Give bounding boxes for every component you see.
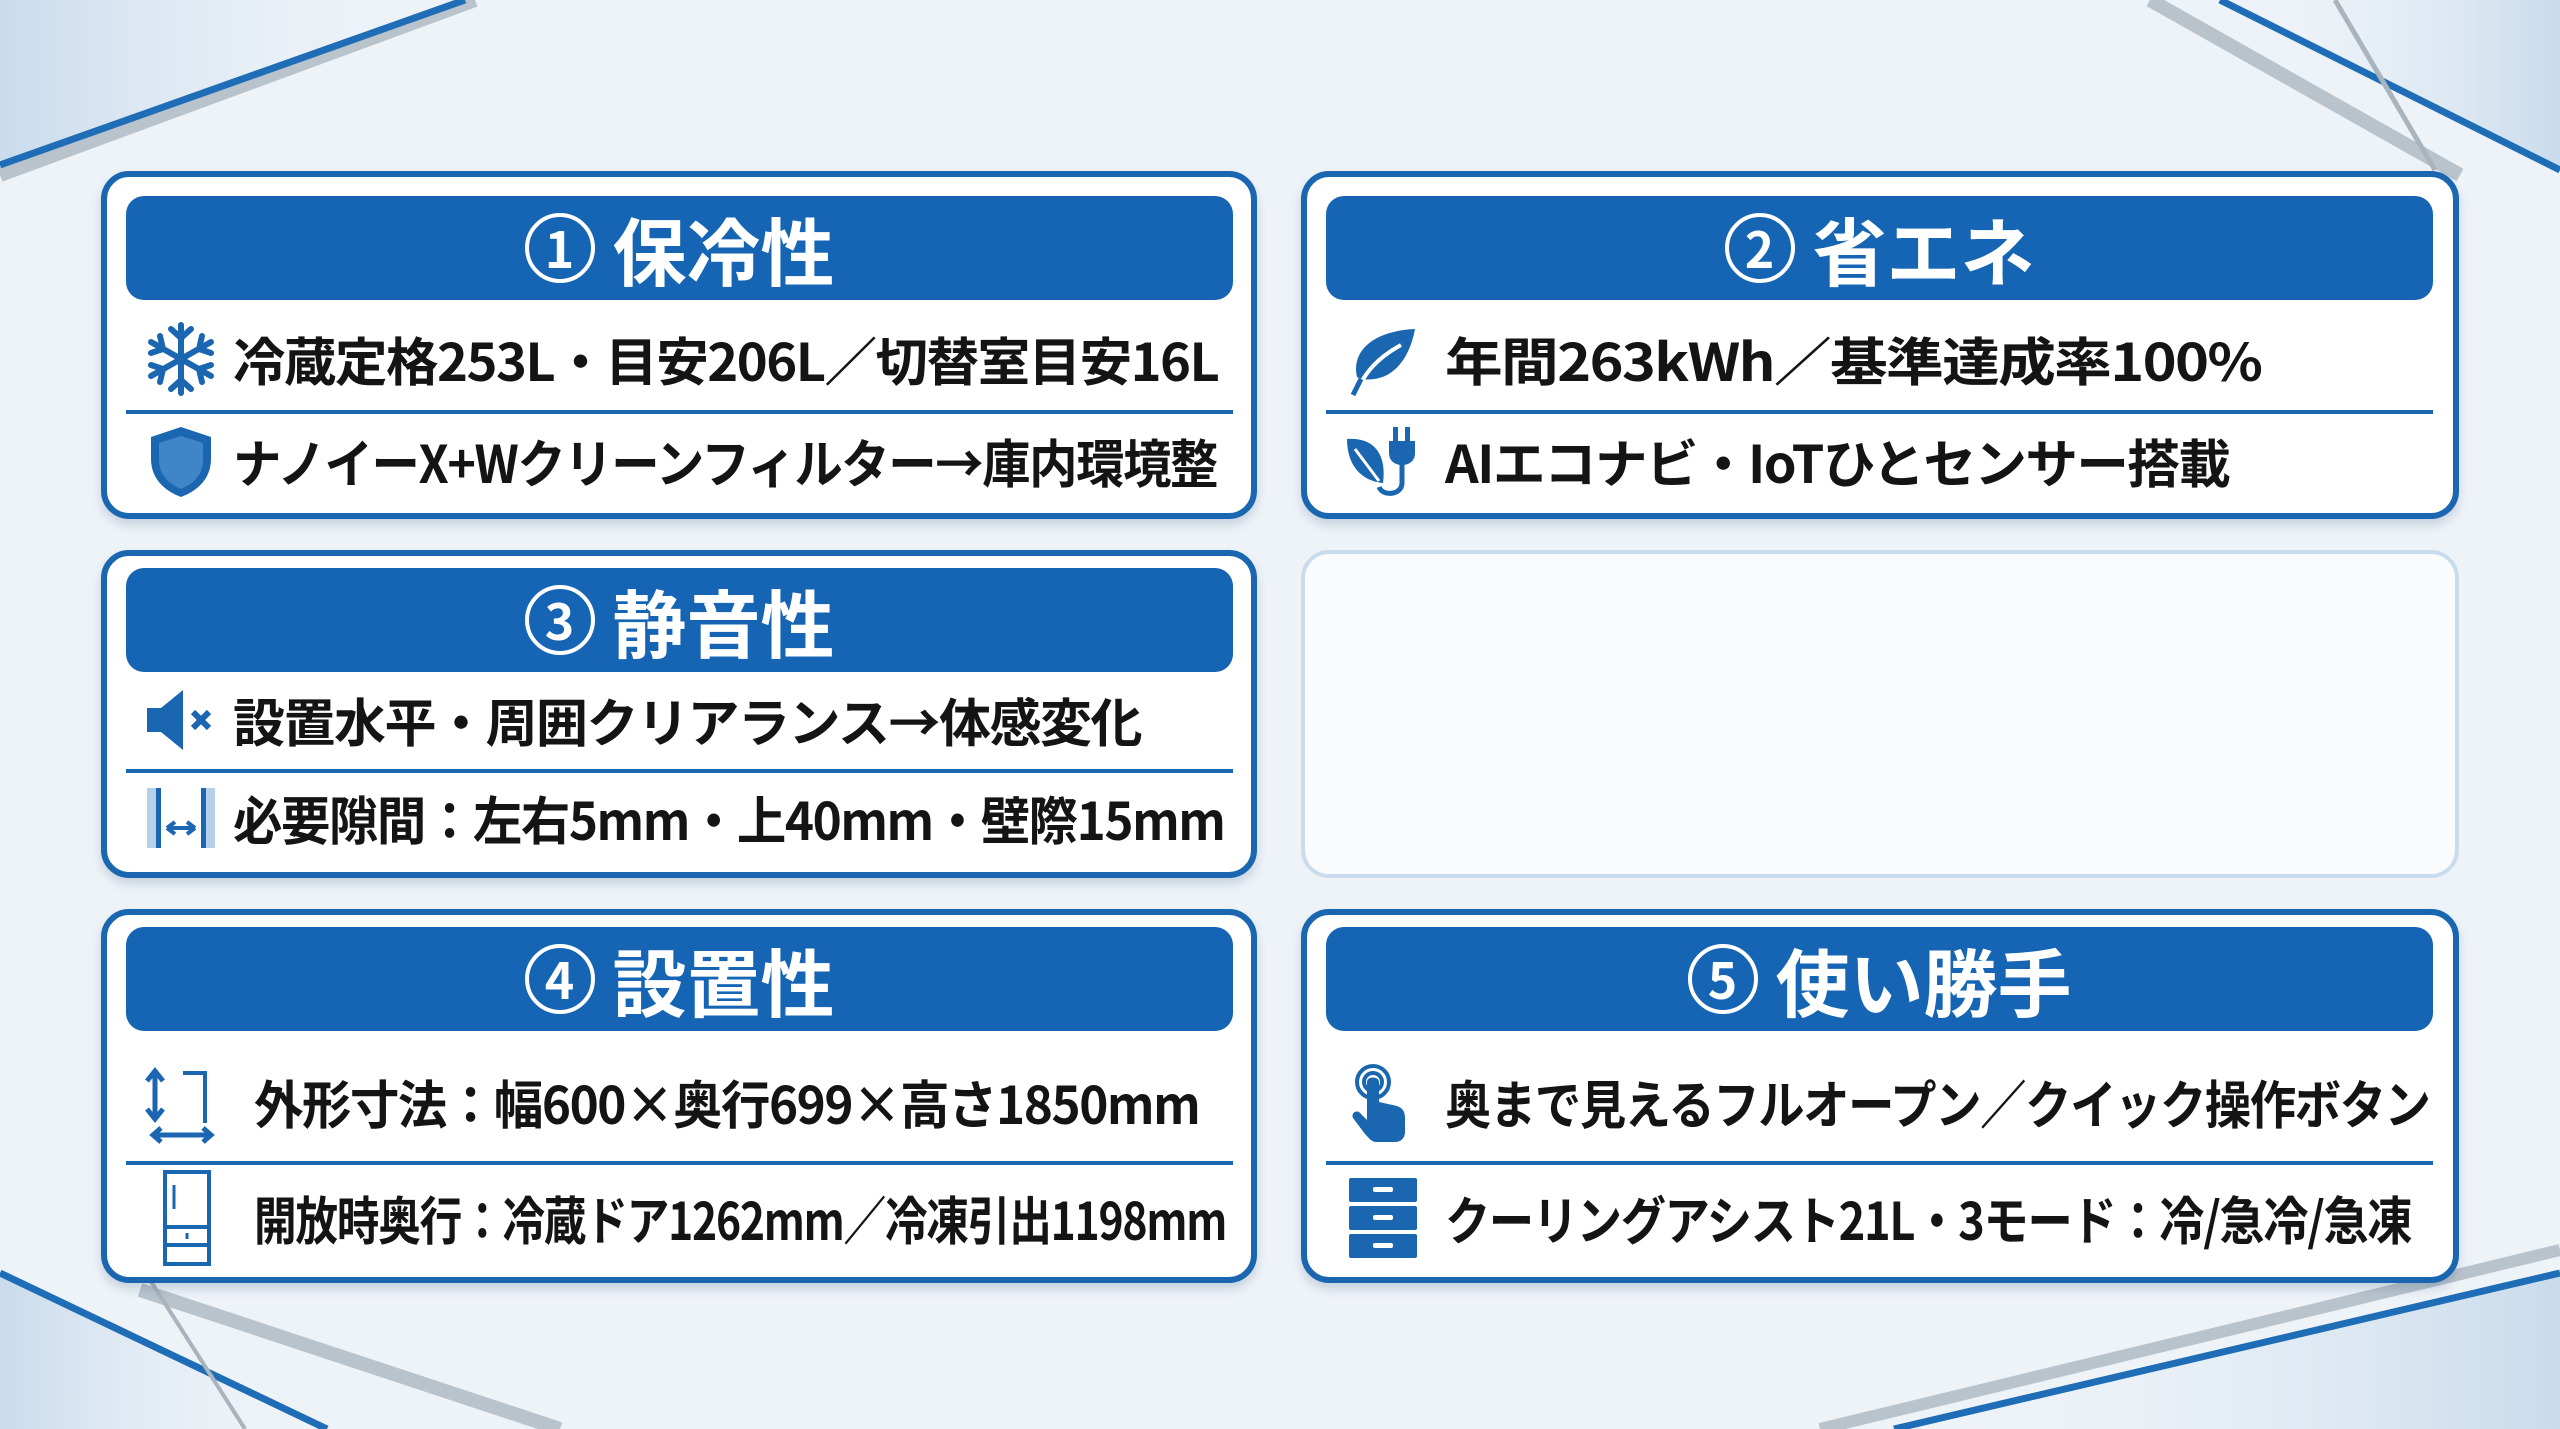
header 3: 静音性 <box>612 566 834 674</box>
header 5 <box>1326 927 2433 1031</box>
icon: dimension arrows <box>145 1067 215 1144</box>
row: cooling assist: クーリングアシスト21L・3モード：冷/急冷/急凍 <box>1445 1180 2411 1255</box>
header 1: 保冷性 <box>612 194 834 302</box>
icon: speaker mute <box>147 690 212 750</box>
row: energy: 年間263kWh／基準達成率100% <box>1445 321 2261 396</box>
header 3 <box>126 568 1233 672</box>
header 3: 3 <box>545 583 574 655</box>
row: filter: ナノイーX+Wクリーンフィルター→庫内環境整 <box>233 423 1217 498</box>
icon: touch hand <box>1352 1064 1405 1142</box>
row: capacity: 冷蔵定格253L・目安206L／切替室目安16L <box>233 321 1218 396</box>
header 1 <box>126 196 1233 300</box>
icon: snowflake <box>148 322 214 396</box>
icon: leaf plug <box>1347 427 1415 496</box>
header 5: 5 <box>1708 942 1737 1014</box>
row: dimensions: 外形寸法：幅600×奥行699×高さ1850mm <box>254 1064 1199 1139</box>
header 2 <box>1326 196 2433 300</box>
icon: leaf <box>1350 329 1415 396</box>
header 4: 4 <box>545 942 574 1014</box>
icon: shield <box>151 427 211 497</box>
icon: gap <box>147 788 215 848</box>
row: open depth: 開放時奥行：冷蔵ドア1262mm／冷凍引出1198mm <box>254 1180 1226 1255</box>
header 5: 使い勝手 <box>1776 926 2072 1032</box>
panel 4: 設置性 <box>101 909 1257 1283</box>
row: quiet: 設置水平・周囲クリアランス→体感変化 <box>233 682 1141 757</box>
empty panel <box>1301 550 2459 878</box>
row: AI: AIエコナビ・IoTひとセンサー搭載 <box>1445 423 2229 498</box>
header 2: 省エネ <box>1812 194 2034 302</box>
panel 1: 保冷性 <box>101 171 1257 519</box>
header 2: 2 <box>1745 211 1774 283</box>
panel 3: 静音性 <box>101 550 1257 878</box>
header 4: 設置性 <box>612 926 834 1032</box>
row: clearance: 必要隙間：左右5mm・上40mm・壁際15mm <box>233 780 1224 855</box>
header 4 <box>126 927 1233 1031</box>
icon: fridge <box>163 1170 211 1266</box>
icon: drawers <box>1349 1178 1417 1258</box>
panel 5: 使い勝手 <box>1301 909 2459 1283</box>
row: full open: 奥まで見えるフルオープン／クイック操作ボタン <box>1445 1064 2430 1139</box>
header 1: 1 <box>545 211 574 283</box>
panel 2: 省エネ <box>1301 171 2459 519</box>
